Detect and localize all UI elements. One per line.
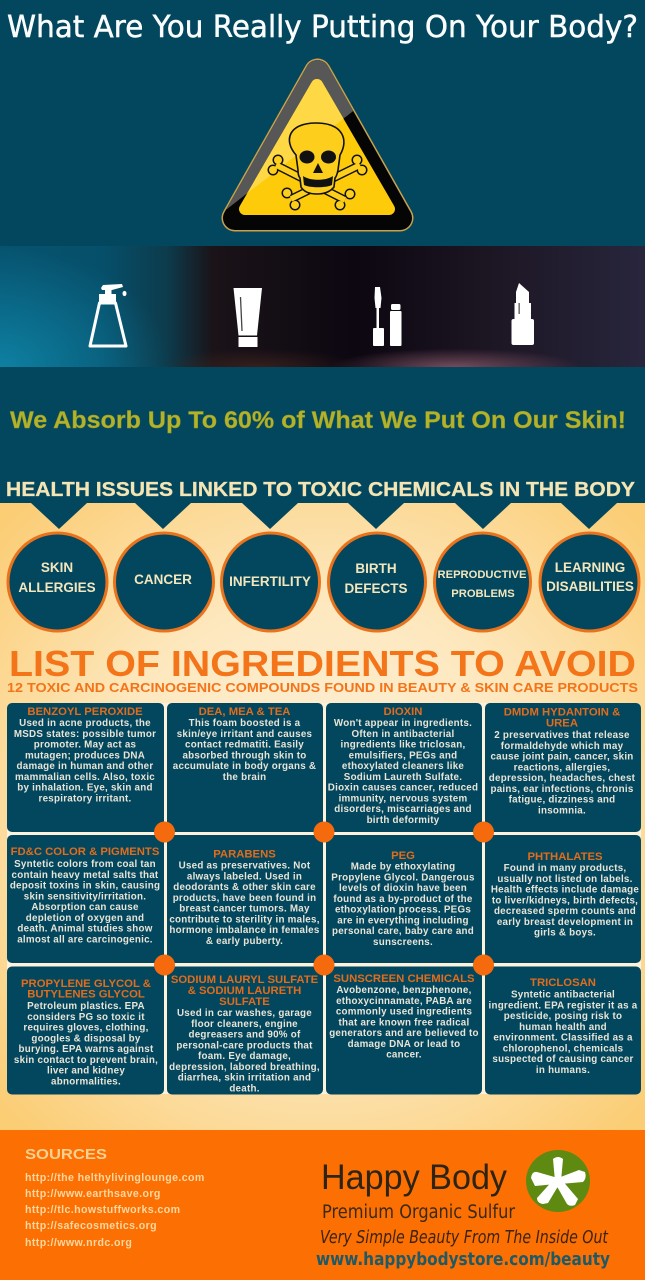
light grid lines behind cards [7,703,641,1094]
card: dioxin: immunity, nervous system [339,793,467,804]
sources list: http://www.earthsave.org [25,1188,161,1200]
card: sunscreen chemicals: Avobenzone, benzphenone, [336,985,472,996]
icon: poison warning sign [235,72,400,218]
downward chevrons [31,503,617,529]
card: benzoyl peroxide: BENZOYL PEROXIDE [27,706,143,718]
icon: pump bottle [90,284,126,346]
card: sunscreen chemicals: commonly used ingredients [336,1006,472,1018]
card: dioxin [326,703,482,832]
circle: cancer [114,533,214,631]
card: fd&c color: almost all are carcinogenic. [17,934,153,945]
cream background panel [0,503,645,1130]
card: fd&c color [7,835,164,963]
sources list [25,1146,205,1249]
card: propylene glycol: PROPYLENE GLYCOL & [21,978,151,990]
circle: skin allergies: SKIN [41,560,73,575]
card: dea mea tea: This foam boosted is a [189,718,301,729]
card: parabens: breast cancer tumors. May [179,904,310,914]
card: propylene glycol: skin contact to prevent brain, [14,1055,158,1066]
card: dmdm hydantoin: fatigue, dizziness and [509,794,615,806]
tagline: absorb 60%: We Absorb Up To 60% of What We Put On Our Skin! [10,407,626,434]
card: dioxin: disorders, miscarriages and [334,804,472,815]
card: peg: Made by ethoxylating [351,862,455,872]
card: dioxin: Won't appear in ingredients. [334,718,472,729]
card: triclosan [485,966,641,1094]
card: dioxin: Often in antibacterial [352,729,454,740]
card: dmdm hydantoin [485,703,641,832]
card: triclosan: pesticide, posing risk to [504,1011,622,1022]
card: dioxin: Sodium Laureth Sulfate. [344,772,462,783]
icon: mascara [373,287,402,346]
circle: learning disabilities [540,533,639,631]
circle: reproductive problems [434,533,530,631]
card: fd&c color: FD&C COLOR & PIGMENTS [11,846,160,858]
circle: infertility [222,533,320,631]
card: triclosan: Syntetic antibacterial [511,990,615,1000]
sources list: http://tlc.howstuffworks.com [25,1204,180,1216]
card: peg: found as a by-product of the [333,894,473,905]
card: fd&c color: contain heavy metal salts that [12,870,159,881]
card: propylene glycol [7,966,164,1094]
card: dioxin: birth deformity [367,815,440,826]
card: peg: ethoxylation process. PEGs [335,904,471,916]
circle: infertility: INFERTILITY [229,574,311,589]
circle: birth defects: BIRTH [355,561,397,576]
card: triclosan: suspected of causing cancer [492,1054,634,1065]
card: peg: levels of dioxin have been [339,883,467,894]
card: sunscreen chemicals: cancer. [386,1050,422,1060]
circle: birth defects [328,533,426,631]
card: triclosan: TRICLOSAN [530,977,596,989]
card: phthalates: Found in many products, [504,863,626,874]
card: benzoyl peroxide: damage in human and other [17,761,153,772]
card: propylene glycol: requires gloves, clothing, [23,1022,149,1034]
card: peg: Propylene Glycol. Dangerous [331,872,475,883]
card: sodium lauryl sulfate: SULFATE [219,996,270,1008]
card: parabens: always labeled. Used in [187,871,302,882]
icon: lipstick [512,283,534,345]
brand: happy body: Happy Body [321,1158,507,1197]
card: dea mea tea: the brain [223,772,266,783]
card: sodium lauryl sulfate: foam. Eye damage, [198,1051,291,1062]
circle: birth defects: DEFECTS [344,581,408,596]
health issue circles [8,533,639,631]
card: sunscreen chemicals: generators and are believed to [329,1028,479,1039]
card: dea mea tea [167,703,323,832]
sources list: http://the helthylivinglounge.com [25,1172,205,1184]
card: phthalates [485,835,641,963]
card: benzoyl peroxide: respiratory irritant. [39,793,131,804]
banner: cosmetic products [0,246,645,367]
heading: health issues: HEALTH ISSUES LINKED TO TOXIC CHEMICALS IN THE BODY [6,479,636,501]
card: benzoyl peroxide: by inhalation. Eye, skin and [17,782,153,794]
orange junction dots [154,822,494,976]
card: sodium lauryl sulfate: Used in car washes, garage [177,1008,312,1019]
card: propylene glycol: liver and kidney [47,1066,125,1076]
card: dea mea tea: DEA, MEA & TEA [199,706,290,718]
card: dioxin: DIOXIN [384,706,422,718]
card: propylene glycol: considers PG so toxic it [27,1012,145,1023]
card: sodium lauryl sulfate: SODIUM LAURYL SULFATE [171,974,319,986]
circle: cancer: CANCER [134,572,192,587]
teal header background [0,0,645,510]
card: dea mea tea: skin/eye irritant and causes [177,729,313,740]
card: benzoyl peroxide: promoter. May act as [34,740,137,750]
card: triclosan: human health and [519,1022,607,1033]
card: fd&c color: death. Animal studies show [17,924,153,934]
card: sodium lauryl sulfate: depression, labored breathing, [169,1062,320,1073]
icon: cream tube [234,288,262,347]
card: sodium lauryl sulfate: & SODIUM LAURETH [188,985,301,997]
card: dea mea tea: contact redmatiti. Easily [185,740,304,750]
card: fd&c color: depletion of oxygen and [26,913,144,924]
sources list: http://www.nrdc.org [25,1237,132,1249]
card: dmdm hydantoin: formaldehyde which may [501,741,624,752]
card: dea mea tea: accumulate in body organs & [173,761,316,772]
sources list: SOURCES [25,1146,107,1163]
title: What Are You Really Putting On Your Body? [7,10,638,45]
card: dmdm hydantoin: 2 preservatives that release [494,730,630,741]
card: sunscreen chemicals: SUNSCREEN CHEMICALS [333,973,475,985]
card: triclosan: in humans. [536,1065,590,1076]
card: sunscreen chemicals: ethoxycinnamate, PABA are [336,996,472,1007]
card: benzoyl peroxide: MSDS states: possible tumor [14,729,156,740]
card: benzoyl peroxide: Used in acne products, the [19,718,151,729]
card: benzoyl peroxide: mammalian cells. Also, toxic [15,772,155,783]
card: propylene glycol: googles & disposal by [31,1033,141,1044]
circle: reproductive problems: PROBLEMS [451,588,515,600]
card: peg: personal care, baby care and [332,926,474,937]
icon: happy body logo [526,1150,590,1212]
card: fd&c color: Syntetic colors from coal tan [14,859,156,870]
heading: list of ingredients: LIST OF INGREDIENTS TO AVOID [9,643,636,684]
circle: skin allergies: ALLERGIES [18,580,96,595]
card: dioxin: Dioxin causes cancer, reduced [328,782,478,794]
card: parabens: products, have been found in [173,893,316,904]
card: fd&c color: skin sensitivity/irritation. [24,891,146,902]
card: dioxin: ethoxylated cleaners like [342,761,464,772]
card: benzoyl peroxide [7,703,164,832]
card: dmdm hydantoin: pains, ear infections, chronis [490,784,634,795]
circle: reproductive problems: REPRODUCTIVE [438,569,527,581]
card: parabens [167,835,323,963]
card: parabens: deodorants & other skin care [173,882,316,893]
card: parabens: contribute to sterility in males, [169,914,320,925]
card: phthalates: girls & boys. [534,928,596,938]
card: sunscreen chemicals: that are known free radical [339,1017,469,1028]
card: peg: sunscreens. [373,937,433,948]
card: phthalates: usually not listed on labels. [497,874,633,885]
card: phthalates: Health effects include damage [491,884,639,896]
card: sodium lauryl sulfate: death. [229,1083,260,1094]
circle: skin allergies [8,533,107,631]
card: phthalates: to liver/kidneys, birth defects, [492,895,638,906]
card: parabens: Used as preservatives. Not [179,860,311,872]
card: parabens: hormone imbalance in females [169,925,320,936]
card: dmdm hydantoin: reactions, allergies, [514,762,610,773]
brand: happy body [316,1158,610,1270]
card: sodium lauryl sulfate: floor cleaners, engine [191,1019,298,1030]
card: propylene glycol: burying. EPA warns against [19,1044,154,1055]
card: sunscreen chemicals: damage DNA or lead to [348,1039,460,1050]
circle: learning disabilities: LEARNING [555,560,625,575]
card: fd&c color: deposit toxins in skin, causing [10,880,160,892]
card: propylene glycol: Petroleum plastics. EPA [27,1001,145,1012]
card: sodium lauryl sulfate: degreasers and 90% of [189,1030,301,1040]
card: dmdm hydantoin: DMDM HYDANTOIN & [504,706,620,718]
subheading: 12 TOXIC AND CARCINOGENIC COMPOUNDS FOUND IN BEAUTY & SKIN CARE PRODUCTS [7,680,638,695]
card: fd&c color: Absorption can cause [31,902,139,913]
card: sodium lauryl sulfate [167,966,323,1094]
card: phthalates: early breast development in [497,917,633,928]
card: dmdm hydantoin: insomnia. [538,805,586,816]
card: propylene glycol: abnormalities. [51,1076,121,1087]
card: dea mea tea: absorbed through skin to [182,750,307,761]
card: dmdm hydantoin: UREA [546,718,578,730]
card: sodium lauryl sulfate: diarrhea, skin irritation and [178,1072,311,1084]
card: triclosan: ingredient. EPA register it as a [488,1000,638,1011]
card: sunscreen chemicals [326,966,482,1094]
card: dmdm hydantoin: depression, headaches, chest [489,773,636,784]
card: dioxin: emulsifiers, PEGs and [349,750,457,761]
card: peg: are in everything including [337,915,469,926]
card: parabens: & early puberty. [206,936,283,947]
sources list: http://safecosmetics.org [25,1220,157,1232]
footer panel [0,1130,645,1280]
circle: learning disabilities: DISABILITIES [546,579,634,594]
card: dioxin: ingredients like triclosan, [341,740,465,750]
card: benzoyl peroxide: mutagen; produces DNA [25,750,145,761]
card: phthalates: PHTHALATES [527,851,603,863]
card: triclosan: chlorophenol, chemicals [503,1043,624,1054]
brand: happy body: Premium Organic Sulfur [322,1202,515,1223]
card: peg [326,835,482,963]
card: propylene glycol: BUTYLENES GLYCOL [27,988,145,1000]
card: dmdm hydantoin: cause joint pain, cancer, skin [490,752,634,762]
card: parabens: PARABENS [213,848,276,860]
card: sodium lauryl sulfate: personal-care products that [176,1040,313,1051]
card: triclosan: environment. Classified as a [493,1032,633,1044]
card: peg: PEG [391,850,415,862]
card: phthalates: decreased sperm counts and [494,906,636,917]
